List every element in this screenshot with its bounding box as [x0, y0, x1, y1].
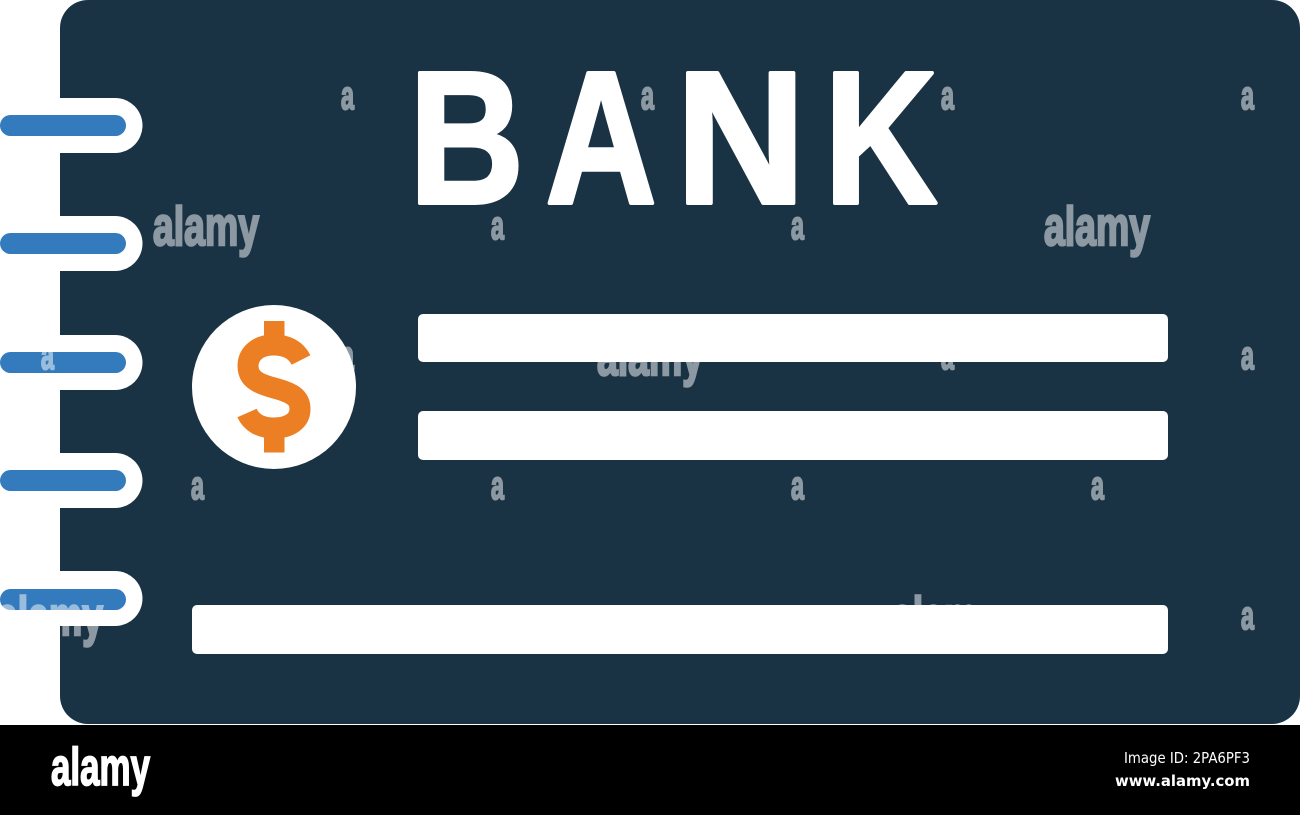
watermarks: a	[1241, 74, 1254, 118]
watermarks: a	[791, 464, 804, 508]
watermarks: a	[191, 464, 204, 508]
text line 1	[418, 314, 1168, 362]
watermarks: a	[491, 204, 504, 248]
watermarks: alamy	[0, 585, 103, 647]
footer bar	[0, 725, 1300, 815]
footer logo: alamy: alamy	[51, 738, 150, 797]
watermarks: alamy	[597, 325, 703, 387]
watermarks	[0, 74, 1254, 647]
icon: dollar coin	[192, 305, 356, 469]
watermarks: a	[941, 74, 954, 118]
text line 3	[192, 605, 1168, 654]
watermarks: a	[791, 204, 804, 248]
heading: BANK: N	[676, 33, 806, 244]
heading: BANK: A	[545, 32, 657, 244]
heading: BANK: B	[409, 33, 524, 244]
watermarks: alamy	[153, 195, 259, 257]
watermarks: a	[1241, 594, 1254, 638]
watermarks: a	[41, 334, 54, 378]
watermarks: alamy	[892, 585, 998, 647]
watermarks: a	[1091, 464, 1104, 508]
footer image id: Image ID: 2PA6PF3	[1124, 749, 1250, 767]
watermarks: a	[491, 464, 504, 508]
footer url: www.alamy.com	[1115, 772, 1250, 790]
watermarks: a	[341, 74, 354, 118]
watermarks: a	[1241, 334, 1254, 378]
icon: spiral rings	[0, 98, 142, 626]
heading: BANK	[409, 32, 937, 244]
text line 2	[418, 411, 1168, 460]
heading: BANK: K	[824, 32, 937, 243]
watermarks: a	[941, 334, 954, 378]
watermarks: a	[641, 74, 654, 118]
watermarks: alamy	[1044, 195, 1150, 257]
watermarks: a	[341, 334, 354, 378]
